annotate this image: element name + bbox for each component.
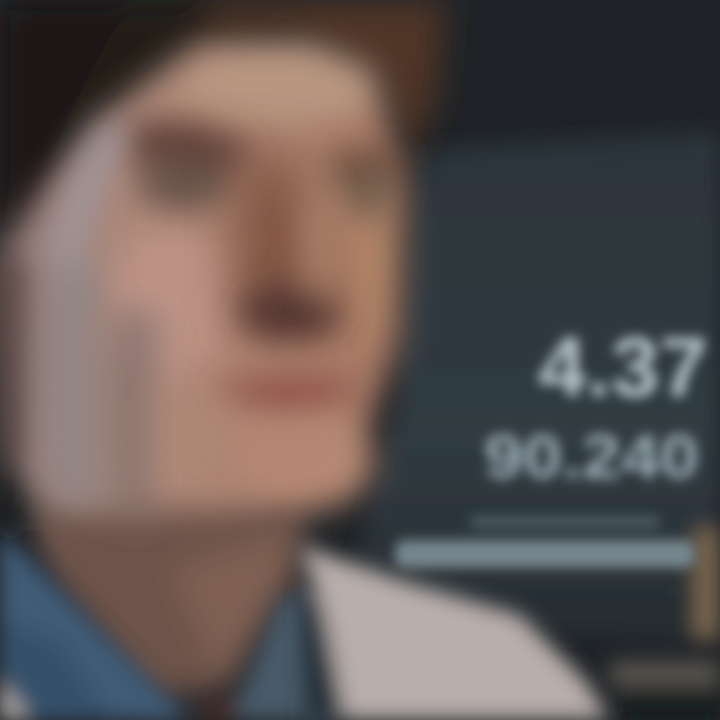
background board — [340, 132, 720, 720]
face — [0, 40, 405, 570]
jacket lapel — [300, 545, 610, 720]
facial shadows: brows, eyes, nose, lips — [125, 120, 405, 470]
neck — [30, 510, 300, 700]
pale streaks across the cheek — [0, 120, 165, 540]
blurred board numbers and captions: 4.37 — [538, 320, 708, 414]
blurred board numbers and captions — [395, 320, 708, 568]
blurred board numbers and captions: 90.240 — [484, 423, 699, 492]
shirt collar — [0, 530, 335, 720]
hair — [0, 0, 445, 240]
